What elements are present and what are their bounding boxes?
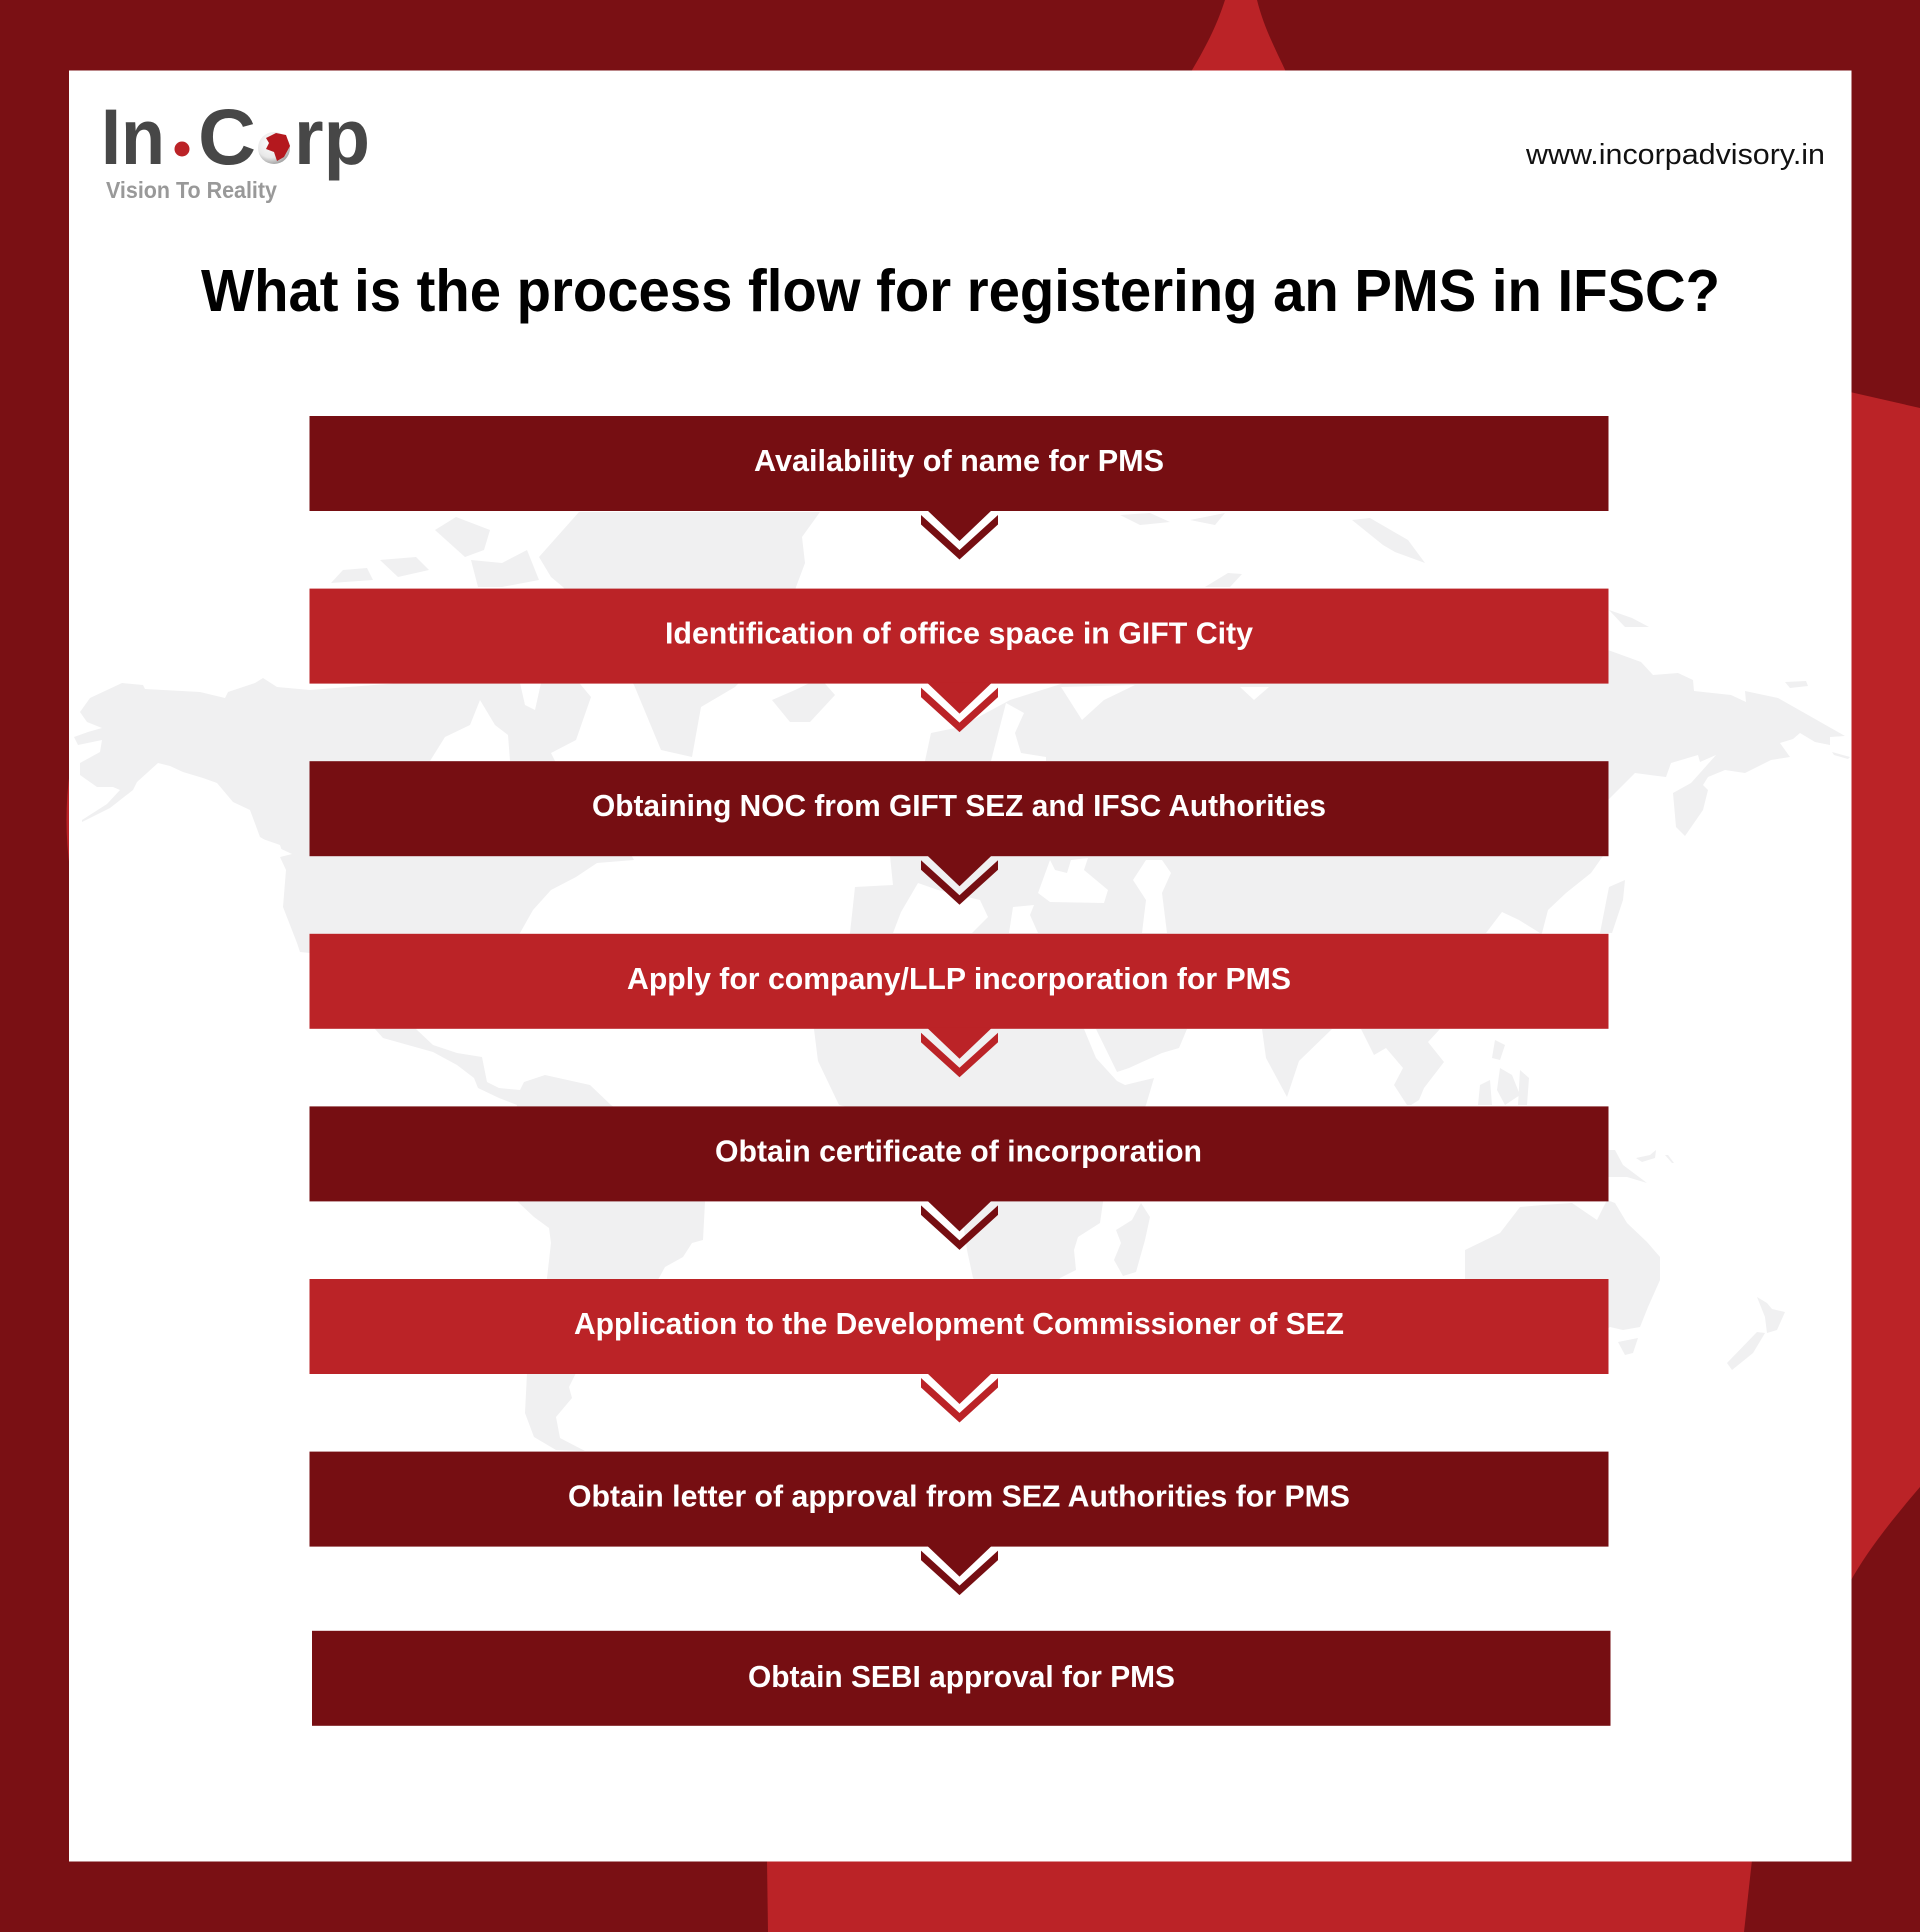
step 6: Application to the Development Commissioner of SEZ — [574, 1307, 1344, 1341]
arrow 4 — [921, 1028, 998, 1077]
step 8 — [312, 1631, 1610, 1726]
step 2: Identification of office space in GIFT City — [665, 617, 1253, 651]
step 3: Obtaining NOC from GIFT SEZ and IFSC Authorities — [592, 789, 1326, 823]
logo wordmark: In — [101, 92, 165, 181]
world map watermark — [74, 512, 1850, 1451]
arrow 6 — [921, 1373, 998, 1422]
website url: www.incorpadvisory.in — [1525, 139, 1825, 171]
arrow 7 — [921, 1546, 998, 1595]
step 1: Availability of name for PMS — [754, 444, 1164, 478]
logo: In.Corp — [101, 92, 370, 203]
step 2 — [310, 589, 1608, 684]
sea cut-outs — [240, 683, 1540, 933]
step 7: Obtain letter of approval from SEZ Authorities for PMS — [568, 1480, 1350, 1514]
step 7 — [310, 1452, 1608, 1547]
step 5: Obtain certificate of incorporation — [715, 1134, 1202, 1168]
step 5 — [310, 1106, 1608, 1201]
arrow 3 — [921, 855, 998, 905]
title: What is the process flow for registering an PMS in IFSC? — [201, 258, 1720, 324]
logo red dot — [174, 142, 190, 156]
logo tagline: Vision To Reality — [106, 177, 277, 203]
step 6 — [310, 1279, 1608, 1374]
arrow 1 — [921, 510, 998, 560]
arrow 5 — [921, 1200, 998, 1250]
logo wordmark: C — [198, 92, 256, 181]
logo wordmark: rp — [294, 92, 370, 181]
step 4: Apply for company/LLP incorporation for PMS — [627, 962, 1291, 996]
arrow 2 — [921, 683, 998, 732]
logo wordmark — [101, 92, 370, 181]
logo globe — [258, 132, 290, 164]
step 1 — [310, 416, 1608, 511]
step 3 — [310, 761, 1608, 856]
step 8: Obtain SEBI approval for PMS — [748, 1660, 1175, 1694]
step 4 — [310, 934, 1608, 1029]
